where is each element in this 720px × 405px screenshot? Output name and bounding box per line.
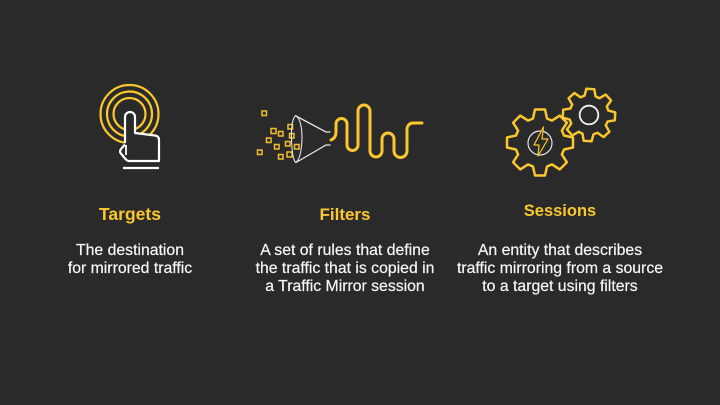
text: Sessions description: to a target using filters (482, 278, 638, 295)
icon: target with pointing hand (100, 85, 159, 168)
text: Filters description: the traffic that is copied in (256, 260, 434, 277)
heading: Targets: Targets (99, 204, 161, 224)
text: Sessions description: traffic mirroring from a source (457, 260, 663, 277)
text: Targets description: The destination (76, 242, 184, 258)
heading: Sessions: Sessions (524, 202, 596, 220)
text: Targets description: for mirrored traffic (68, 260, 192, 277)
icon: filter funnel with waveform (258, 105, 422, 162)
text: Filters description: A set of rules that define (260, 242, 430, 258)
text: Sessions description: An entity that describes (478, 242, 642, 258)
text: Targets description (68, 242, 192, 277)
text: Sessions description (457, 242, 663, 295)
heading: Filters: Filters (319, 205, 371, 224)
text: Filters description: a Traffic Mirror session (265, 278, 425, 295)
icon: gears with lightning bolt (507, 88, 616, 176)
text: Filters description (256, 242, 434, 295)
